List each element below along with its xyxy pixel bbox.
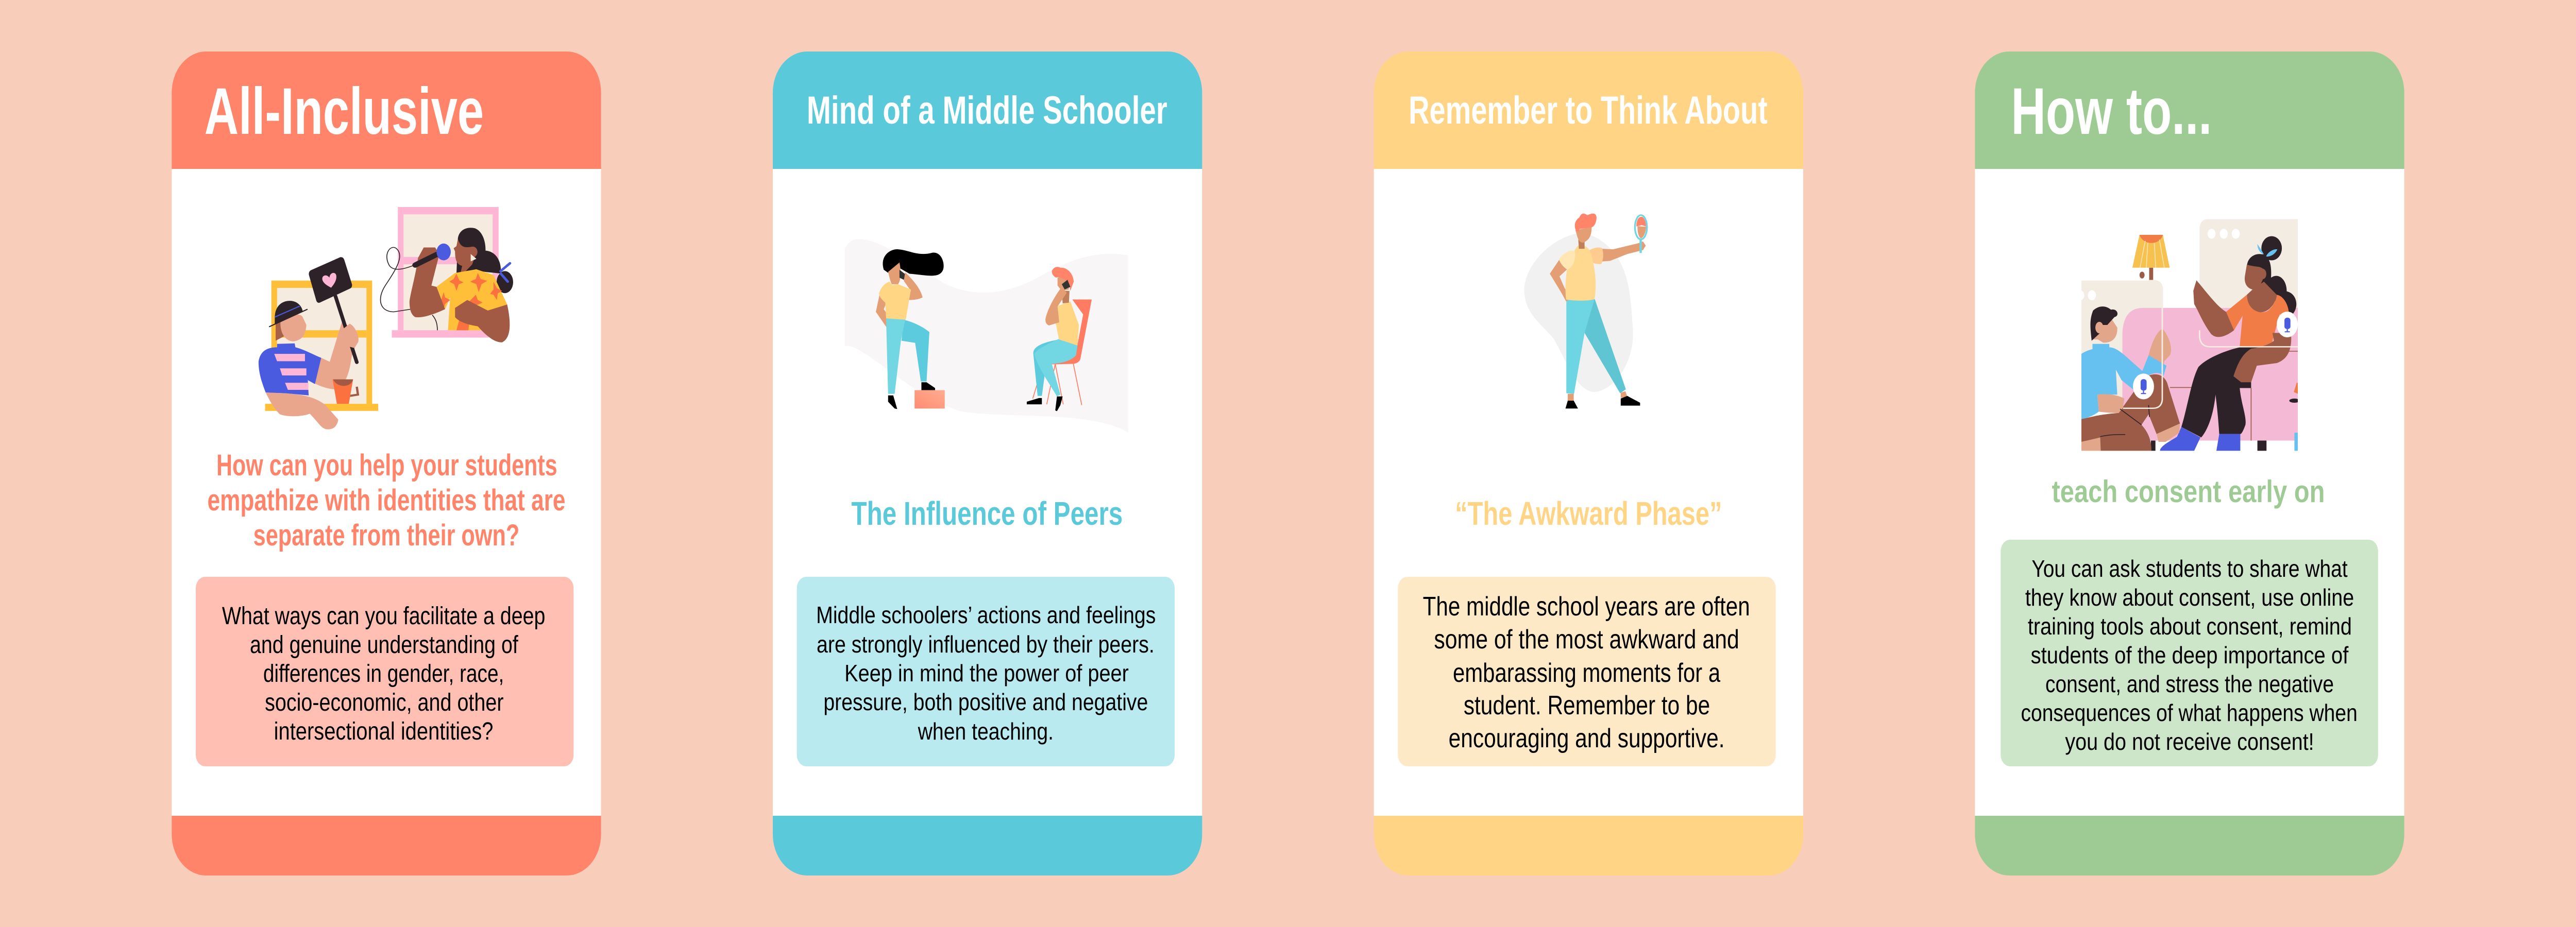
card 1 body text: What ways can you facilitate a deep — [222, 603, 545, 630]
card 3 body text: embarassing moments for a — [1453, 658, 1721, 688]
card 1 subheading — [207, 449, 566, 552]
illustration: person looking in mirror — [1524, 214, 1647, 408]
small table edge — [2290, 383, 2298, 451]
card 1 coloured shell — [172, 52, 601, 876]
card 2 body text: are strongly influenced by their peers. — [817, 631, 1155, 658]
card 4 body text — [2021, 556, 2358, 755]
card 4 text box — [2001, 540, 2378, 766]
sofa overlap — [2123, 308, 2162, 398]
card 1 subheading: empathize with identities that are — [207, 484, 566, 517]
window dots — [2081, 290, 2096, 300]
card 3 body text: some of the most awkward and — [1434, 625, 1739, 655]
left video window — [2081, 280, 2162, 398]
card 4 coloured shell — [1975, 52, 2404, 876]
illustration: neighbours at windows with sign and microphone — [259, 207, 513, 430]
card 4 white body — [1975, 169, 2404, 816]
card 1 body text: socio-economic, and other — [265, 689, 504, 716]
singer — [410, 228, 513, 342]
card 1 white body — [172, 169, 601, 816]
panel: How to card — [1975, 52, 2404, 876]
card 3 text box — [1398, 577, 1776, 766]
card 3 title: Remember to Think About — [1409, 89, 1768, 132]
microphone badge left — [2133, 373, 2154, 399]
card 4 subheading: teach consent early on — [2052, 474, 2325, 509]
floor lamp — [2132, 235, 2170, 280]
card 2 body text: pressure, both positive and negative — [823, 689, 1148, 715]
illustration: two people video chatting on sofa — [2076, 219, 2299, 451]
card 3 body text: student. Remember to be — [1464, 691, 1710, 720]
woman standing — [876, 249, 944, 409]
card 2 text box — [797, 577, 1175, 766]
coral box — [914, 390, 945, 408]
man — [2081, 306, 2180, 451]
card 4 body text: consequences of what happens when — [2021, 700, 2358, 726]
card 4 body text: consent, and stress the negative — [2045, 671, 2334, 697]
grey blob — [1524, 232, 1633, 392]
card 4 body text: they know about consent, use online — [2025, 585, 2354, 611]
card 2 body text — [816, 602, 1156, 745]
card 3 body text — [1423, 592, 1750, 753]
card 1 body text: intersectional identities? — [274, 718, 494, 745]
card 1 title: All-Inclusive — [205, 74, 484, 148]
card 3 body text: encouraging and supportive. — [1449, 724, 1725, 753]
pink window — [392, 207, 499, 338]
sofa — [2141, 308, 2298, 451]
soft wave background — [845, 239, 1128, 433]
card 1 text box — [196, 577, 573, 766]
card 4 body text: training tools about consent, remind — [2028, 613, 2352, 640]
illustration: two people on phones — [845, 239, 1128, 433]
man with heart sign — [259, 257, 359, 430]
right video window — [2200, 219, 2298, 308]
card 2 coloured shell — [773, 52, 1202, 876]
card 1 body text — [222, 603, 545, 745]
card 2 white body — [773, 169, 1202, 816]
panel: Remember to Think About card — [1374, 52, 1803, 876]
card 1 subheading: How can you help your students — [216, 449, 557, 482]
card 2 title: Mind of a Middle Schooler — [807, 89, 1167, 132]
man seated on chair — [1027, 267, 1092, 411]
person — [1550, 214, 1647, 408]
card 3 white body — [1374, 169, 1803, 816]
orange mug — [333, 380, 358, 404]
card 4 body text: You can ask students to share what — [2031, 556, 2348, 582]
card 4 body text: you do not receive consent! — [2065, 729, 2314, 755]
card 1 body text: and genuine understanding of — [250, 631, 518, 659]
microphone cord — [380, 247, 437, 330]
card 1 body text: differences in gender, race, — [263, 660, 504, 688]
panel: All-Inclusive card — [172, 52, 601, 876]
card 2 subheading: The Influence of Peers — [852, 496, 1123, 532]
woman — [2160, 236, 2296, 451]
panel: Mind of a Middle Schooler card — [773, 52, 1202, 876]
card 1 subheading: separate from their own? — [253, 519, 519, 552]
microphone badge right — [2277, 312, 2298, 337]
card 2 body text: Keep in mind the power of peer — [844, 660, 1129, 686]
card 3 body text: The middle school years are often — [1423, 592, 1750, 622]
card 3 subheading: “The Awkward Phase” — [1455, 496, 1722, 532]
card 2 body text: Middle schoolers’ actions and feelings — [816, 602, 1156, 628]
yellow window — [265, 281, 378, 411]
card 3 coloured shell — [1374, 52, 1803, 876]
card 2 body text: when teaching. — [918, 718, 1054, 745]
video call frame outlines — [2123, 281, 2298, 408]
card 4 body text: students of the deep importance of — [2031, 642, 2349, 668]
card 4 title: How to... — [2011, 74, 2212, 148]
